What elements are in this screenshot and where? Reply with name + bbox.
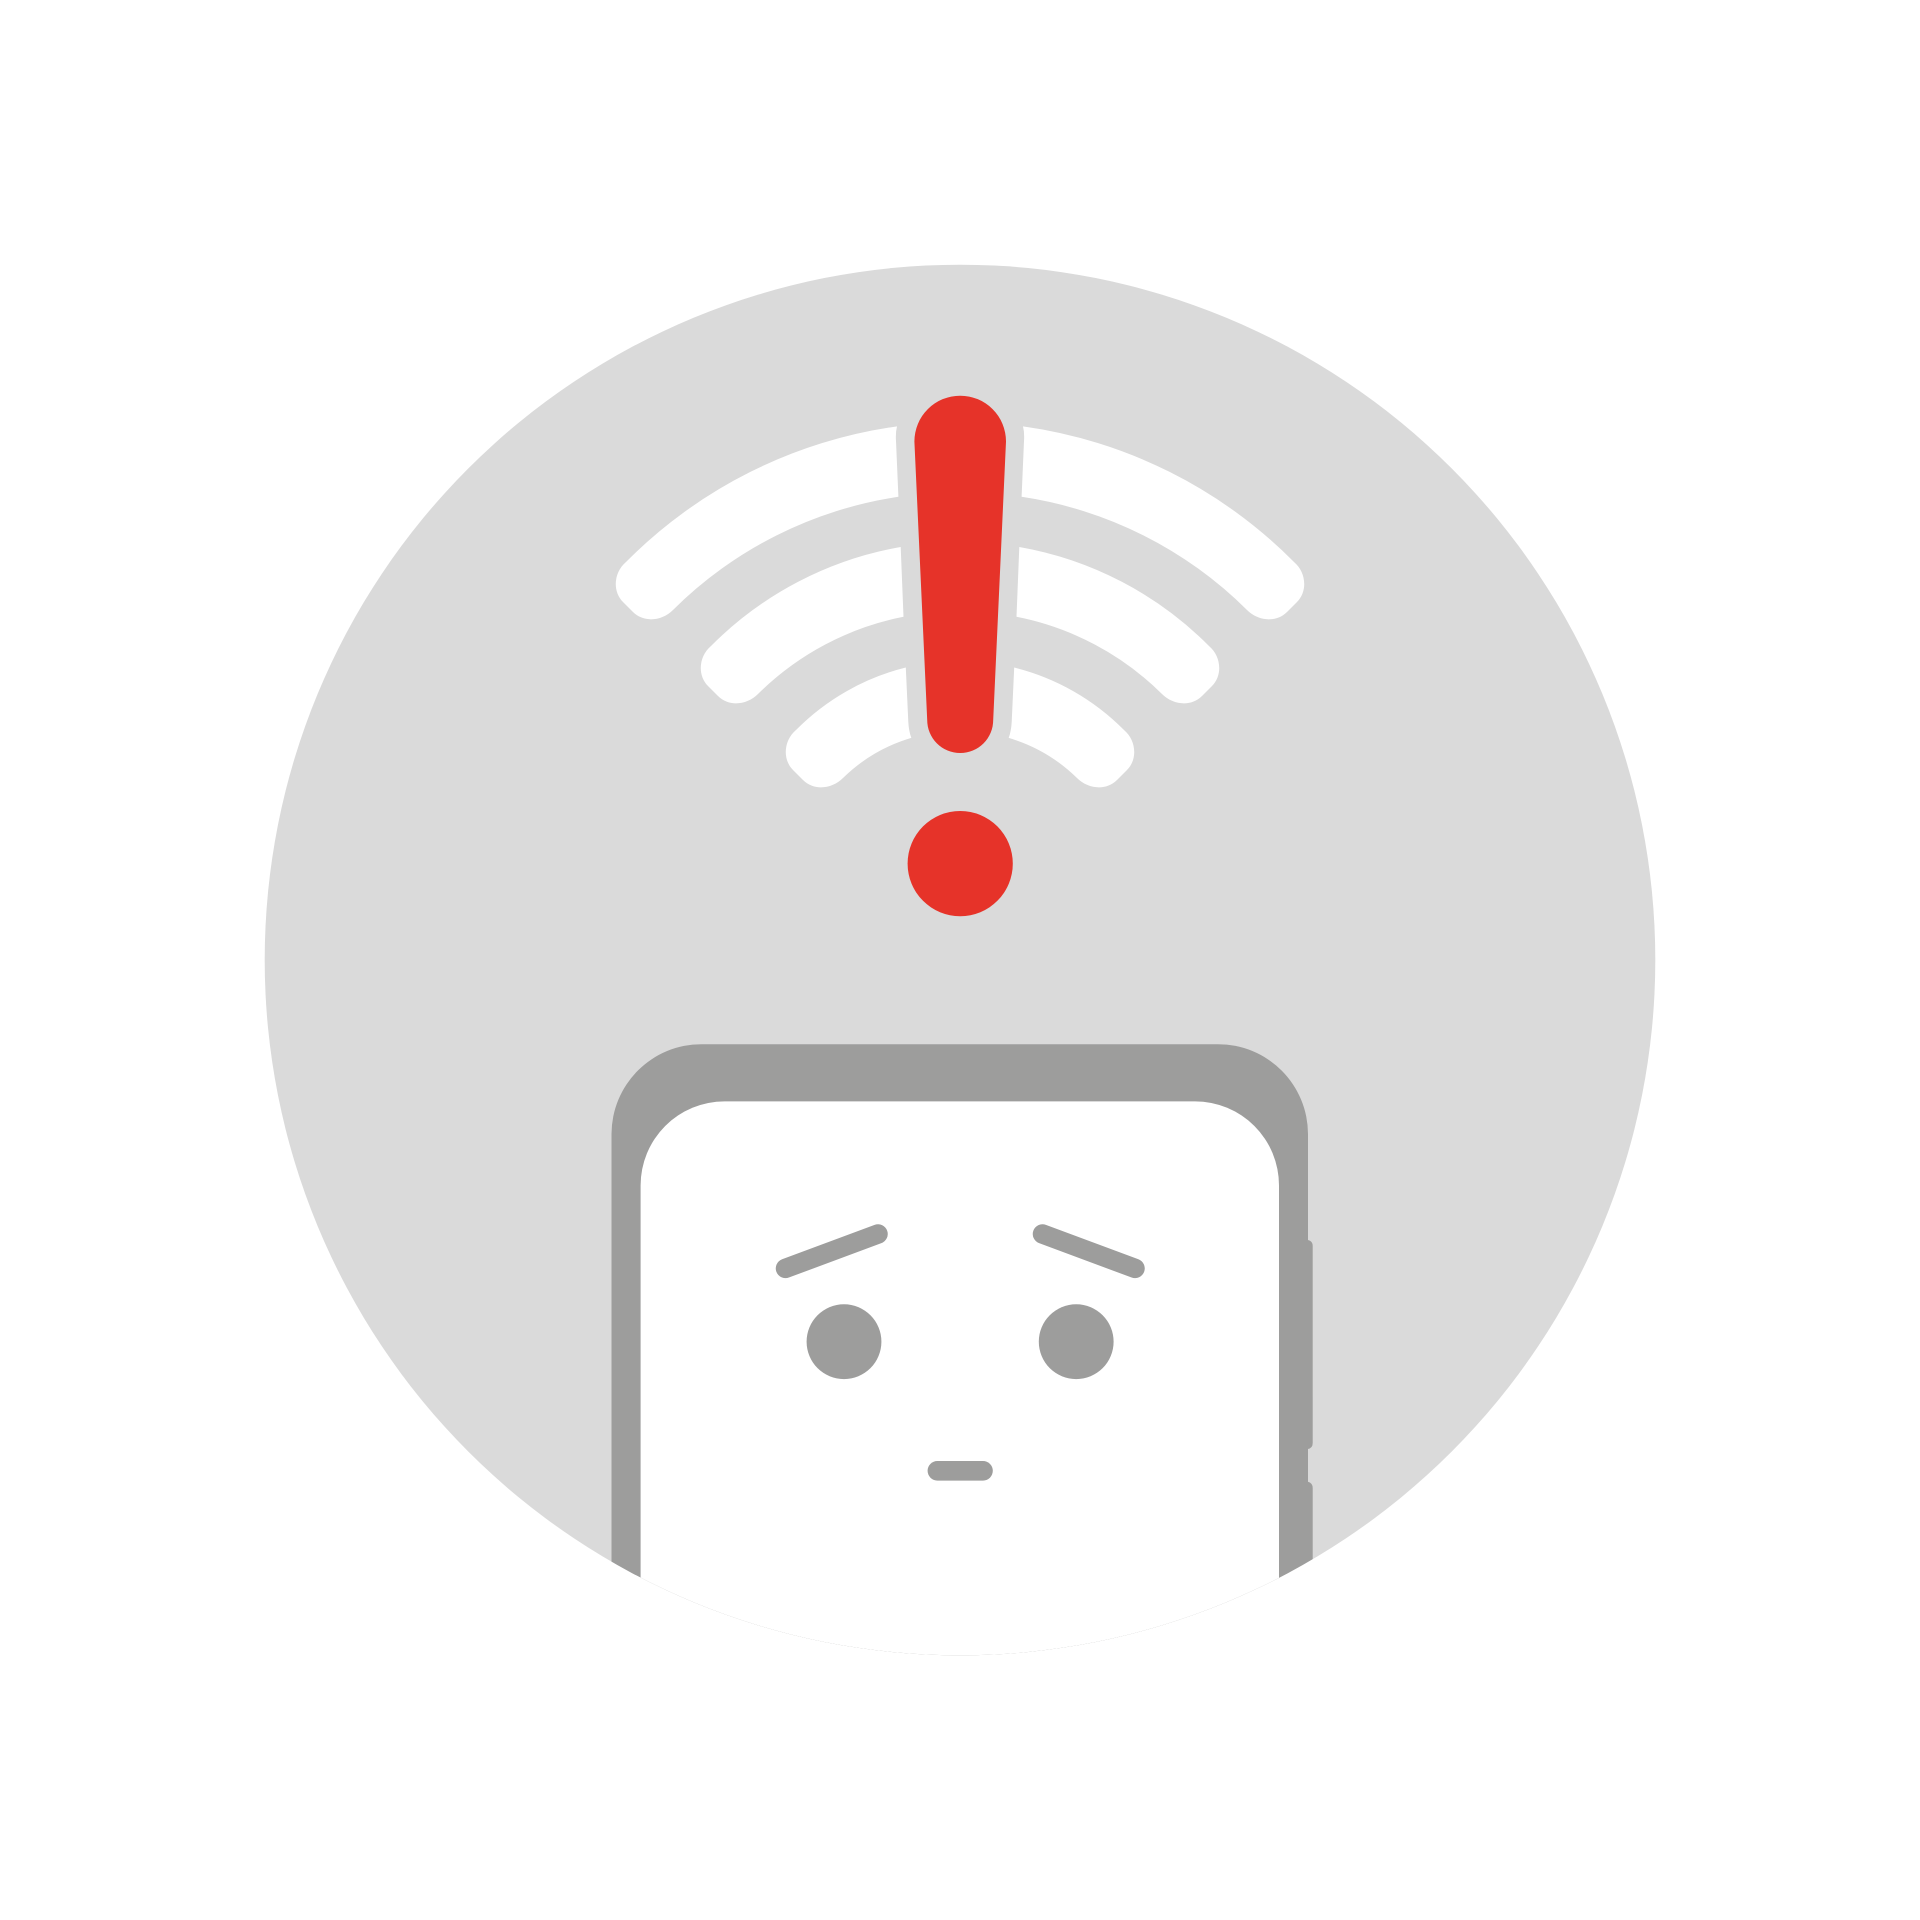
- phone body: [612, 1044, 1313, 1700]
- mouth: [928, 1461, 993, 1481]
- icon: Wi-Fi signal arcs: [616, 426, 1304, 787]
- inner arc left: [786, 668, 911, 787]
- exclamation dot: [908, 811, 1013, 916]
- phone face: [786, 1234, 1135, 1481]
- icon: red exclamation mark: [908, 396, 1013, 916]
- right eyebrow: [1042, 1234, 1135, 1268]
- middle arc left: [701, 547, 904, 703]
- exclamation bar: [914, 396, 1006, 753]
- right eye: [1039, 1304, 1114, 1379]
- left eye: [807, 1304, 881, 1379]
- inner arc right: [1009, 668, 1134, 787]
- infographic: worried phone with Wi-Fi alert: [264, 264, 1656, 1656]
- outer arc right: [1022, 426, 1304, 619]
- outer arc left: [616, 426, 898, 619]
- phone screen: [641, 1101, 1279, 1700]
- middle arc right: [1016, 547, 1219, 703]
- phone character clipped by circle: [612, 1044, 1313, 1700]
- background circle: [265, 265, 1655, 1655]
- left eyebrow: [786, 1234, 878, 1268]
